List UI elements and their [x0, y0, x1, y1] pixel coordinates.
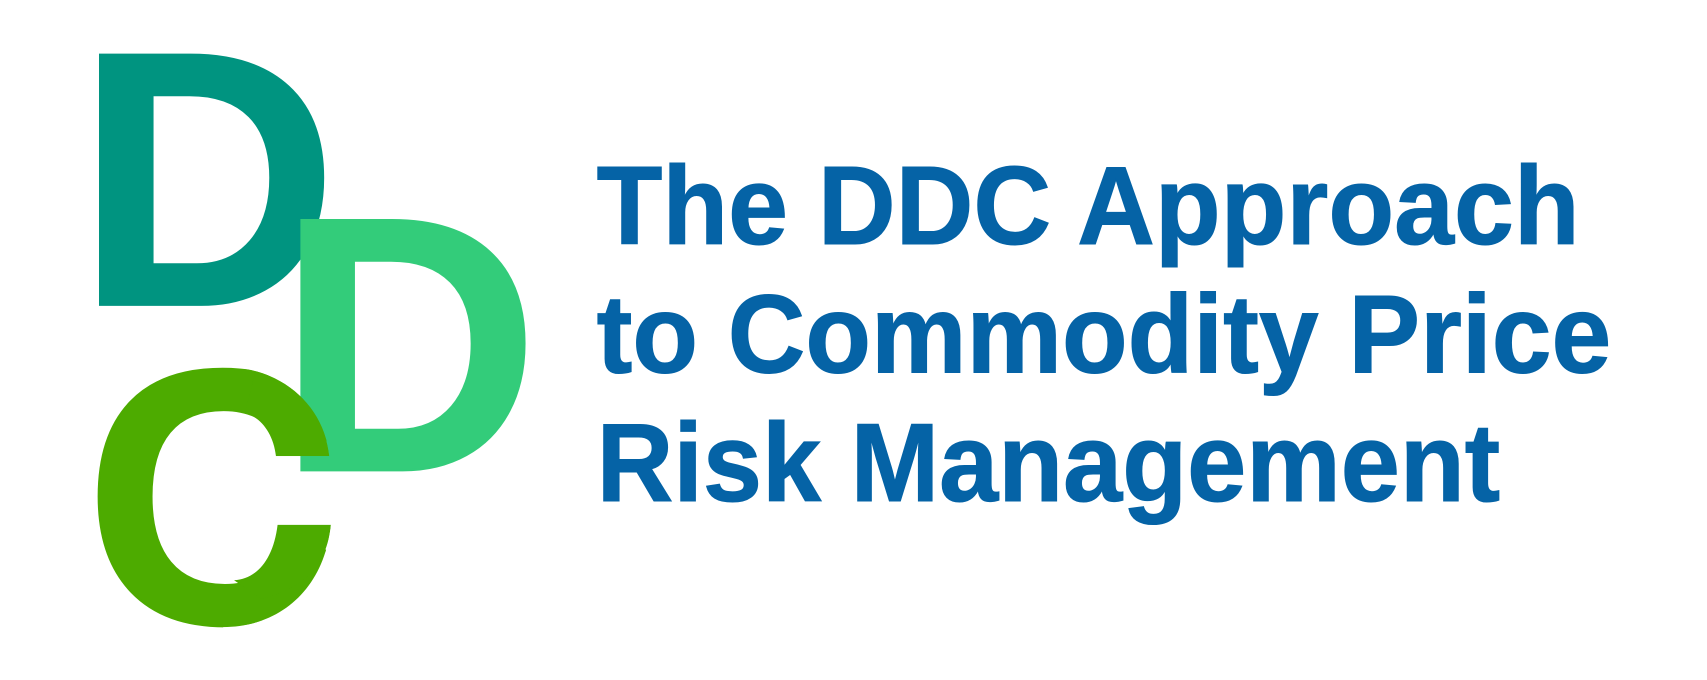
logo letter: light green D: D: [277, 142, 540, 548]
title line 2: to Commodity Price: [597, 271, 1611, 396]
title line 1: The DDC Approach: [597, 143, 1580, 268]
logo letter: green C: [98, 368, 331, 628]
title line 3: Risk Management: [597, 400, 1500, 525]
title: [597, 143, 1611, 525]
logo: DDC letters: [98, 54, 526, 628]
